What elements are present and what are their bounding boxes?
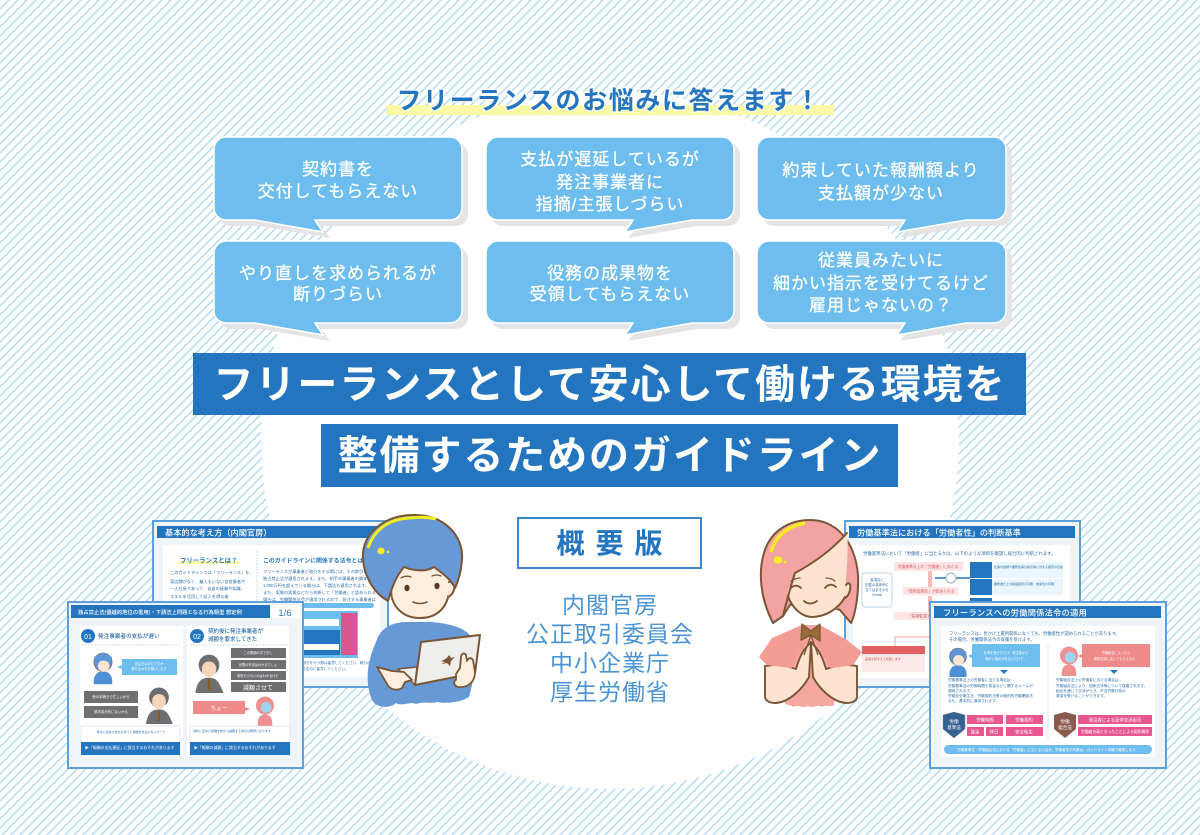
thumbnail: worker status criteria page: 労働基準法において「労働者」に当たるかは、以下のような項目を確認し総合的に判断されます。 (863, 550, 1055, 557)
speech bubble: lower fee: 支払額が少ない (818, 184, 944, 203)
speech bubble: lower fee: 約束していた報酬額より (782, 161, 980, 180)
thumbnail: basic concept page: このガイドラインに関係する法令とは (263, 556, 363, 564)
thumbnail: worker status criteria page: Check! (872, 593, 882, 597)
thumbnail: prohibited conduct page: ▶「報酬の支払遅延」に該当するおそれがあります (85, 745, 175, 750)
issuing agencies (526, 592, 694, 705)
thumbnail: labour law application page: 労働基準法の労働時間や賃金などに関するルールが (948, 683, 1033, 688)
thumbnail: prohibited conduct page (68, 602, 303, 768)
overview label (518, 518, 701, 568)
thumbnail: prohibited conduct page: 世間の不況はわかるでしょ (239, 662, 277, 667)
title line 1 (193, 353, 1026, 415)
thumbnail: prohibited conduct page: 独占禁止法(優越的地位の濫用)・下請法上問題となる行為類型 想定例 (78, 608, 242, 616)
speech bubble: late payment: 指摘/主張しづらい (536, 195, 684, 214)
thumbnail: labour law application page: 労働基準法上の労働者に当たる場合は… (948, 677, 1015, 682)
thumbnail: basic concept page: 場合は、労働関係法令が適用されるので、発注する事業者は (263, 596, 376, 603)
speech bubble: lower fee (757, 137, 1012, 238)
thumbnail: labour law application page: 労働契約 (1015, 716, 1033, 724)
thumbnail: basic concept page: 一人社長であって、自身の経験や知識、 (170, 585, 245, 592)
thumbnail: labour law application page: 組合を通じて交渉ができ、不当労働行為の (1056, 688, 1126, 693)
thumbnail: labour law application page: 団体交渉に応じてもらえるの… (1094, 656, 1138, 661)
thumbnail: basic concept page: 1,000万円を超えている場合は、下請法も適用されます。 (263, 582, 369, 589)
thumbnail: labour law application page: 救済を受けることができます。 (1056, 693, 1107, 698)
thumbnail: labour law application page: 休日 (990, 728, 998, 736)
boy hair (363, 515, 462, 601)
thumbnail: prohibited conduct page: 請求書が先にないから (94, 709, 128, 714)
thumbnail: labour law application page: 安全衛生 (1015, 728, 1033, 736)
thumbnail: worker status criteria page: 各項目に (870, 577, 884, 582)
thumbnail: labour law application page: 基準法 (947, 724, 961, 731)
thumbnail: prohibited conduct page: 01 (84, 634, 92, 641)
speech bubble: employee-like: 細かい指示を受けてるけど (773, 274, 989, 293)
thumbnail: worker status criteria page: 労働基準法における「労働者性」の判断基準 (857, 528, 1021, 538)
speech bubble: deliverable: 受領してもらえない (530, 285, 690, 304)
girl eyes and mouth (790, 585, 836, 589)
thumbnail: worker status criteria page: 記載の具体例に (865, 582, 889, 587)
thumbnail: labour law application page: 令も、基本的に適用されます。 (948, 698, 999, 703)
girl face (787, 533, 848, 617)
thumbnail: basic concept page: フリーランスが事業者と取引をする際には、その取引は (263, 568, 368, 575)
thumbnail: prohibited conduct page: 発注に定めた支払日までに報酬を支払わないケース (97, 729, 165, 734)
speech bubble: redo: 断りづらい (293, 285, 383, 304)
thumbnail: prohibited conduct page: この業績の中で少し (244, 650, 272, 655)
thumbnail: labour law application page: フリーランスは、見かけ上雇用関係になくても、労働者性が認められることがあります。 (949, 630, 1120, 637)
boy body (368, 622, 475, 707)
thumbnail: labour law application page: 労働時間 (976, 716, 994, 724)
thumbnail: basic concept page: 基本的な考え方（内閣官房） (165, 528, 271, 538)
thumbnail: labour law application page: 労働組合法により、団体交渉等について保護されます。 (1056, 683, 1147, 688)
thumbnail: basic concept page: 実店舗がなく、雇人もいない自営業者や (170, 578, 245, 585)
thumbnail: basic concept page: 判断されます。適用される法令に留意してください。 (263, 666, 349, 671)
thumbnail: labour law application page: 労働組合法上の労働者に当たる場合は… (1056, 677, 1123, 682)
issuing agencies: 公正取引委員会 (526, 621, 694, 647)
white central circle (261, 91, 959, 789)
girl ribbon (801, 624, 820, 655)
speech bubble: late payment (486, 137, 740, 238)
thumbnail: labour law application page (930, 602, 1166, 768)
thumbnail: worker status criteria page: 労働基準法上の「労働者」にあたる (898, 564, 959, 569)
speech bubble: deliverable (486, 241, 740, 341)
thumbnail: labour law application page: 労働組合員となったことによる契約解除 (1081, 729, 1149, 734)
thumbnail: prohibited conduct page: 減額させて (243, 684, 273, 692)
speech bubble: employee-like: 雇用じゃないの？ (809, 296, 953, 315)
thumbnail: worker status criteria page: 当てはまるかを (865, 587, 889, 592)
thumbnail: labour law application page: 適用されます。 (948, 688, 973, 693)
thumbnail: basic concept page: また、実質の実態などから判断して「労働者」と認められる (263, 589, 376, 596)
illustration: boy with laptop (363, 515, 480, 707)
title line 2 (321, 424, 898, 487)
girl arms and hands (765, 642, 811, 703)
thumbnail: labour law application page: 労働組合に入ったら (1102, 650, 1130, 655)
boy face (391, 555, 450, 618)
speech bubble: contract (214, 137, 468, 238)
thumbnail: prohibited conduct page: 発注事業者の支払が遅い (98, 632, 160, 640)
illustration: girl with hands together (759, 520, 862, 707)
issuing agencies: 中小企業庁 (550, 650, 670, 676)
thumbnail: worker status criteria page: 仕事の依頼や業務従事の指示等に対する諾否の自由 (994, 564, 1063, 569)
speech bubble: late payment: 支払が遅延しているが (520, 150, 700, 169)
girl sleeves (759, 625, 808, 668)
thumbnail: prohibited conduct page: 1/6 (278, 608, 292, 619)
title line 1: フリーランスとして安心して働ける環境を (214, 363, 1006, 407)
speech bubble: redo (214, 241, 468, 341)
thumbnail: prohibited conduct page: 支払日はまだですか (135, 661, 164, 666)
thumbnail: worker status criteria page (845, 521, 1080, 687)
thumbnail: worker status criteria page: 実態を踏まえて判断します (865, 656, 901, 661)
thumbnail: labour law application page: 労働安全衛生法、労働契約法等の個別的労働関係法 (948, 693, 1033, 698)
thumbnail: prohibited conduct page: ▶「報酬の減額」に該当するおそれがあります (194, 745, 276, 750)
thumbnail: labour law application page: 細かい指示があるんだけど… (985, 656, 1027, 661)
thumbnail: labour law application page: 労働 (1060, 718, 1070, 725)
thumbnail: labour law application page: フリーランスへの労働関係法令の適用 (943, 608, 1087, 618)
thumbnail: prohibited conduct page: 02 (193, 634, 201, 641)
thumbnail: labour law application page: 賃金 (971, 728, 980, 736)
laptop (398, 667, 417, 685)
thumbnail: prohibited conduct page: 他の手続きで忙しいから (92, 694, 130, 699)
speech bubble: contract: 交付してもらえない (258, 182, 418, 201)
thumbnail: prohibited conduct page: 減額を要求してきた (208, 635, 257, 643)
thumbnail: worker status criteria page: 業務遂行上の指揮監督の有無、拘束性の有無 (994, 581, 1054, 586)
thumbnail: basic concept page: 独占禁止法が適用されます。また、相手の事業者の資本金 (263, 575, 372, 582)
thumbnail: labour law application page: 労働 (949, 718, 959, 725)
thumbnail: worker status criteria page: 「指揮監督下の労働」 (908, 614, 946, 618)
thumbnail: prohibited conduct page: 契約後に発注事業者が (208, 627, 264, 635)
speech bubble: late payment: 発注事業者に (556, 173, 664, 192)
thumbnail: basic concept page: フリーランスが事業者と取引を行う際は留意してください。取引の実態に応じて (263, 660, 392, 665)
thumbnail: labour law application page: 仕事を受けただけ、発注者から (984, 650, 1028, 655)
boy hands (377, 667, 412, 690)
speech bubble: employee-like: 従業員みたいに (818, 251, 944, 270)
subtitle heading: フリーランスのお悩みに答えます！ (396, 87, 822, 115)
thumbnail: prohibited conduct page: 契約に定めた報酬を後から減額する場合は問題となります (193, 728, 271, 733)
boy eyes and mouth (404, 585, 410, 591)
thumbnail: prohibited conduct page: 御社もつらいのはわかるけど (237, 673, 279, 678)
girl dress (783, 625, 838, 707)
thumbnail: basic concept page: このガイドラインでは「フリーランス」を、 (170, 569, 254, 576)
thumbnail: labour law application page: 発注者による団体交渉拒否 (1089, 716, 1142, 724)
overview label: 概要版 (556, 528, 674, 559)
speech bubble: contract: 契約書を (302, 160, 374, 179)
thumbnail: labour law application page: その場合、労働関係法令の保護を受けます。 (949, 636, 1035, 643)
thumbnail: labour law application page: 組合法 (1058, 724, 1072, 731)
thumbnail: worker status criteria page: 「使用従属性」が認められる (905, 588, 955, 594)
speech bubble: employee-like (757, 241, 1012, 341)
thumbnail: basic concept page: フリーランスとは？ (180, 556, 237, 564)
thumbnail: prohibited conduct page: ちょー (211, 705, 227, 712)
title line 2: 整備するためのガイドライン (338, 434, 882, 478)
issuing agencies: 厚生労働省 (550, 679, 670, 705)
thumbnail: prohibited conduct page: 振り込みをお願いします (131, 666, 167, 671)
issuing agencies: 内閣官房 (562, 592, 658, 618)
speech bubble: redo: やり直しを求められるが (239, 264, 437, 283)
girl hair (761, 520, 858, 623)
thumbnail: basic concept page: スキルを活用して収入を得る者 (170, 593, 229, 600)
thumbnail: basic concept page (153, 521, 392, 687)
speech bubble: deliverable: 役務の成果物を (547, 264, 673, 283)
thumbnail: labour law application page: 労働基準法・労働組合法における「労働者」に当たるか否か、労働者性の判断は、ガイドライン本編で確認します。 (957, 747, 1139, 752)
